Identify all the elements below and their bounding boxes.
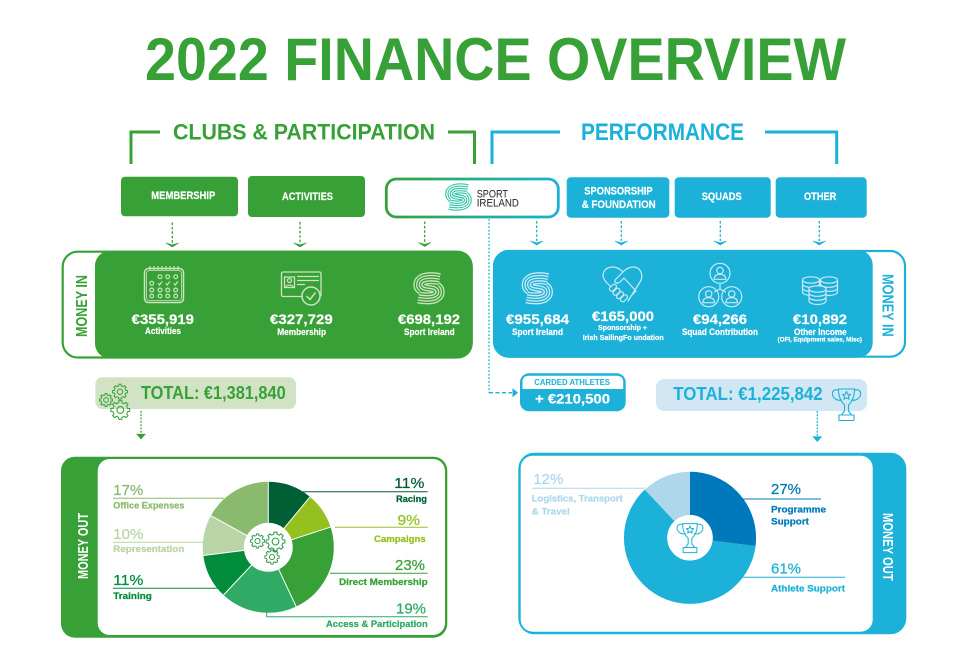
title: 2022 FINANCE OVERVIEW (145, 26, 846, 93)
icon: gears (100, 384, 130, 419)
label: direct membership (330, 557, 428, 588)
icon: donut centre trophy (677, 524, 703, 553)
icon: trophy (832, 389, 861, 420)
total: clubs (95, 377, 296, 419)
label: racing (303, 475, 428, 505)
label: representation: 10% (113, 526, 143, 543)
amount: other: (OFI, Equipment sales, Misc) (778, 338, 862, 344)
arrow: performance total to money out (814, 411, 821, 441)
source box: sport ireland: SPORT (477, 188, 508, 200)
panel: performance money in (494, 250, 905, 358)
amount: sponsorship (583, 308, 664, 342)
label: campaigns: Campaigns (374, 534, 426, 545)
label: money out: MONEY OUT (75, 513, 92, 579)
panel: clubs money in (63, 251, 473, 358)
amount: activities (132, 311, 194, 336)
label: programme support (743, 481, 826, 528)
label: programme support: Programme (771, 505, 826, 516)
label: programme support: 27% (771, 481, 801, 498)
label: office expenses: 17% (113, 482, 143, 499)
label: money in: MONEY IN (74, 275, 91, 337)
label: logistics: 12% (533, 471, 563, 488)
label: athlete support (743, 560, 846, 595)
source box: other: OTHER (804, 191, 836, 203)
amount: sport ireland: €698,192 (398, 311, 460, 327)
source box: membership (121, 177, 238, 216)
label: money in: MONEY IN (878, 274, 896, 337)
amount: sport ireland (506, 311, 569, 337)
carded athletes badge: CARDED ATHLETES (534, 377, 610, 387)
amount: other: Other Income (794, 327, 847, 337)
icon: membership card (282, 272, 321, 305)
icon: heart handshake (603, 267, 642, 303)
source box: sport ireland (386, 179, 558, 217)
source box: membership: MEMBERSHIP (151, 190, 215, 202)
icon: calendar (144, 266, 184, 302)
label: office expenses (113, 482, 224, 512)
arrows: blue sources into money in (530, 221, 826, 245)
source box: sponsorship and foundation (567, 177, 669, 218)
amount: membership (270, 311, 333, 337)
source box: sponsorship and foundation: & FOUNDATION (582, 199, 656, 211)
label: representation (113, 526, 204, 555)
amount: sponsorship: Irish SailingFo undation (583, 333, 664, 342)
heading: performance: PERFORMANCE (581, 119, 744, 146)
donut chart: performance spending (646, 493, 734, 582)
arrow: clubs total to money out (138, 411, 144, 438)
amount: sponsorship: €165,000 (592, 308, 654, 324)
heading: clubs and participation (131, 120, 474, 164)
source box: sport ireland: IRELAND (477, 198, 519, 210)
icon: coins (802, 277, 838, 304)
label: athlete support: Athlete Support (771, 584, 846, 595)
source box: sponsorship and foundation: SPONSORSHIP (584, 186, 653, 198)
panel: clubs money out (61, 457, 447, 638)
label: office expenses: Office Expenses (113, 501, 184, 512)
label: training (113, 572, 219, 602)
label: programme support: Support (771, 517, 810, 528)
amount: sport ireland: €955,684 (506, 311, 569, 327)
label: access and participation: 19% (396, 600, 426, 617)
label: logistics: & Travel (532, 507, 570, 518)
amount: other: €10,892 (793, 311, 847, 327)
icon: squad people (699, 263, 742, 307)
label: logistics: Logistics, Transport (532, 494, 624, 505)
amount: sponsorship: Sponsorship + (598, 323, 648, 332)
amount: membership: Membership (277, 327, 326, 337)
amount: sport ireland (398, 311, 460, 337)
amount: squads: €94,266 (693, 311, 747, 327)
label: training: 11% (113, 572, 143, 589)
heading: performance (492, 119, 837, 164)
carded athletes badge: + €210,500 (535, 391, 610, 407)
label: money out: MONEY OUT (879, 513, 896, 581)
label: access and participation (267, 600, 428, 630)
source box: activities: ACTIVITIES (282, 191, 333, 203)
label: training: Training (113, 591, 152, 602)
source box: squads: SQUADS (702, 191, 742, 203)
label: representation: Representation (113, 544, 184, 555)
source box: other (776, 177, 867, 218)
icon: sport ireland swirl (527, 281, 547, 296)
donut chart: clubs spending (203, 481, 331, 607)
source box: squads (675, 177, 771, 218)
label: campaigns (335, 512, 428, 545)
icon: sport ireland swirl (419, 281, 439, 296)
label: campaigns: 9% (398, 512, 420, 529)
amount: squads (682, 311, 758, 337)
label: direct membership: 23% (395, 557, 425, 574)
label: direct membership: Direct Membership (339, 577, 428, 588)
arrows: green sources into money in (166, 222, 431, 247)
amount: squads: Squad Contribution (682, 327, 758, 337)
label: racing: Racing (396, 494, 427, 505)
total: clubs: TOTAL: €1,381,840 (141, 383, 286, 403)
amount: activities: €355,919 (132, 311, 194, 327)
icon: donut centre gears (250, 532, 285, 564)
heading: clubs and participation: CLUBS & PARTICIPATION (173, 120, 435, 144)
amount: activities: Activities (145, 326, 181, 336)
total: performance (656, 379, 867, 420)
arrow: sport ireland to carded athletes (489, 219, 517, 396)
label: access and participation: Access & Participation (326, 619, 428, 630)
source box: activities (248, 176, 365, 217)
amount: membership: €327,729 (270, 311, 333, 327)
panel: performance money out (518, 453, 906, 634)
total: performance: TOTAL: €1,225,842 (673, 384, 823, 404)
amount: other (778, 311, 862, 344)
carded athletes badge (520, 373, 626, 411)
amount: sport ireland: Sport Ireland (404, 327, 455, 337)
label: athlete support: 61% (771, 560, 801, 577)
label: racing: 11% (394, 475, 424, 492)
amount: sport ireland: Sport Ireland (512, 327, 563, 337)
label: logistics (532, 471, 645, 518)
